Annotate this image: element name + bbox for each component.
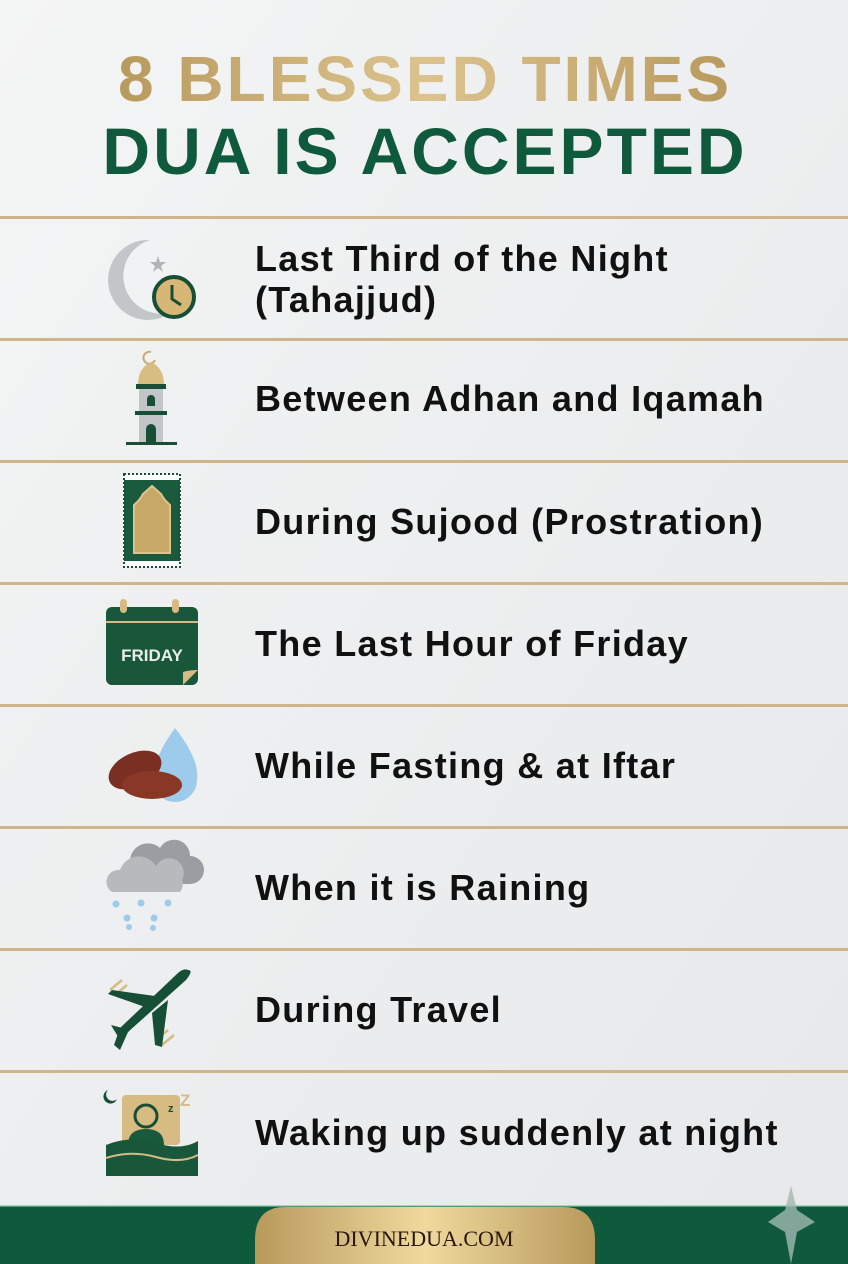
icon: airplane bbox=[108, 969, 191, 1050]
icon: minaret bbox=[126, 352, 177, 445]
row labels: Waking up suddenly at night bbox=[255, 1112, 779, 1153]
icon: friday calendar bbox=[106, 599, 198, 685]
row labels: The Last Hour of Friday bbox=[255, 623, 689, 664]
row labels: Between Adhan and Iqamah bbox=[255, 378, 765, 419]
icon: sleeper: Z bbox=[180, 1091, 190, 1110]
row labels: When it is Raining bbox=[255, 867, 590, 908]
row labels: During Sujood (Prostration) bbox=[255, 501, 764, 542]
icon: moon clock bbox=[108, 240, 194, 320]
footer pill: website bbox=[255, 1207, 595, 1264]
icon: sleeper bbox=[103, 1090, 198, 1176]
row labels: (Tahajjud) bbox=[255, 279, 437, 320]
icon: prayer rug bbox=[124, 474, 180, 567]
icon: friday calendar: FRIDAY bbox=[121, 646, 184, 665]
row labels bbox=[255, 238, 779, 1153]
title: 8 BLESSED TIMES bbox=[118, 43, 732, 115]
title: DUA IS ACCEPTED bbox=[102, 114, 748, 188]
footer band bbox=[0, 1186, 848, 1264]
icon: rain cloud bbox=[106, 840, 204, 931]
row labels: While Fasting & at Iftar bbox=[255, 745, 676, 786]
footer pill: website: DIVINEDUA.COM bbox=[334, 1226, 514, 1251]
title bbox=[102, 43, 748, 188]
icon: sleeper: z bbox=[168, 1103, 174, 1115]
row labels: Last Third of the Night bbox=[255, 238, 669, 279]
icon: dates and water drop bbox=[102, 728, 197, 802]
row labels: During Travel bbox=[255, 989, 502, 1030]
